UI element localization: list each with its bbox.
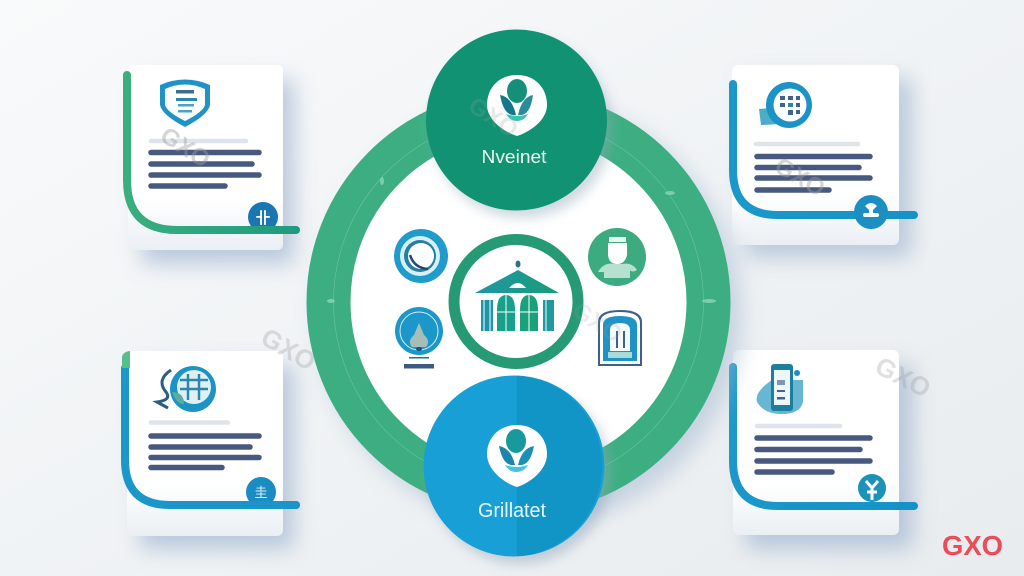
text lines (756, 144, 870, 190)
watermark: GXO: GXO (155, 122, 215, 174)
panel: bottom circle (424, 376, 610, 564)
blue connector (733, 367, 914, 506)
icon: bulb on stand (395, 307, 443, 368)
badge icon: 卝 (255, 210, 271, 227)
watermark: GXO: GXO (871, 350, 936, 403)
icon: leaf pin (487, 425, 547, 487)
green connector (127, 75, 296, 230)
badge icon (246, 477, 276, 507)
icon: water ring (394, 229, 448, 283)
text lines (151, 422, 259, 468)
watermark: GXO: GXO (567, 297, 627, 349)
panel: bottom left card (122, 351, 296, 549)
panel: top circle (426, 30, 612, 218)
panel: top right card (732, 65, 914, 258)
green tip (122, 351, 130, 368)
panel: bottom right card (733, 350, 914, 549)
watermark: GXO: GXO (256, 322, 321, 377)
panel: top left card (127, 65, 296, 264)
chart: central ring (318, 102, 742, 526)
icon: globe grid (759, 82, 812, 128)
icon: shield (160, 80, 210, 127)
badge icon (248, 202, 278, 232)
badge icon: 圭 (254, 485, 268, 500)
text lines (757, 426, 870, 472)
logo: GXO: GXO (942, 530, 1003, 561)
badge icon (858, 474, 886, 502)
label: Grillatet (478, 500, 546, 522)
badge icon (854, 195, 888, 229)
watermark: GXO: GXO (770, 152, 830, 203)
watermark: GXO: GXO (463, 92, 523, 144)
text lines (151, 141, 259, 186)
watermark: GXO (155, 92, 936, 403)
icon: arched window (598, 310, 642, 366)
icon: leaf pin (487, 75, 547, 136)
icon: phone (757, 364, 803, 414)
blue connector (733, 84, 914, 215)
icon: central building (454, 240, 578, 364)
icon: globe (157, 366, 216, 412)
blue connector (125, 368, 296, 505)
label: Nveinet (482, 147, 546, 167)
icon: worker (588, 228, 646, 286)
